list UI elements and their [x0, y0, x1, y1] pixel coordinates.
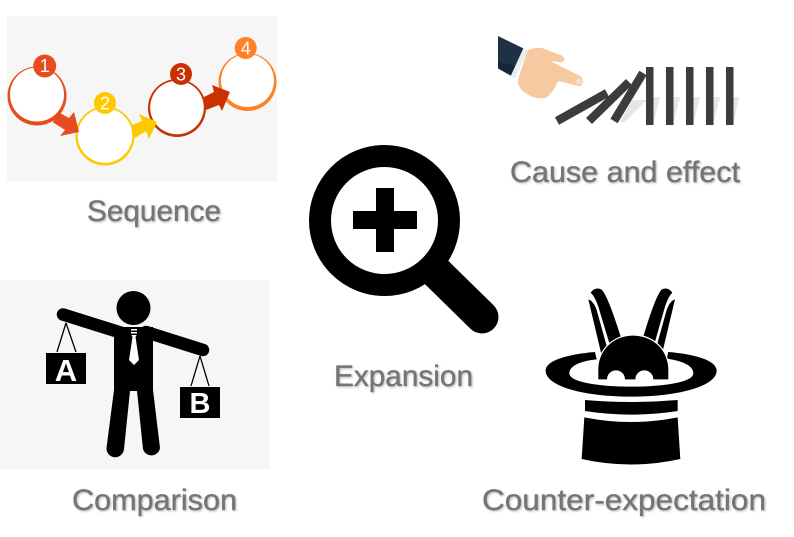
icon: magnifying glass with plus: [320, 156, 482, 317]
icon: hand pushing dominoes: [498, 36, 739, 125]
heading: comparison: Comparison: [72, 484, 237, 517]
heading: sequence: Sequence: [87, 195, 221, 228]
box B: [180, 356, 220, 420]
panel: sequence: [7, 16, 277, 182]
arrow: step 3 to 4: [204, 85, 230, 111]
rabbit ears: [591, 289, 621, 345]
heading: counter-expectation: Counter-expectation: [482, 484, 766, 517]
box B: B: [190, 388, 210, 420]
box A: [46, 323, 86, 388]
arrow: step 1 to 2: [52, 112, 79, 136]
box A: A: [55, 353, 77, 388]
heading: expansion: Expansion: [334, 360, 473, 393]
step 4 circle: 4: [241, 38, 251, 58]
icon: rabbit in a top hat: [546, 289, 717, 464]
step 2 circle: [76, 92, 134, 166]
step 2 circle: 2: [100, 94, 110, 114]
step 3 circle: [148, 63, 206, 137]
step 1 circle: [8, 54, 66, 126]
step 3 circle: 3: [176, 64, 186, 84]
arrow: step 2 to 3: [132, 114, 157, 139]
panel: comparison: [0, 280, 270, 469]
domino shadows: [620, 97, 739, 122]
heading: cause and effect: Cause and effect: [510, 156, 740, 189]
person with arms out: [63, 291, 203, 457]
standing dominoes: [646, 67, 734, 125]
hat brim: [546, 352, 717, 397]
fallen dominoes: [557, 73, 643, 121]
hat body: [582, 417, 680, 464]
step 4 circle: [218, 37, 276, 111]
hat band: [585, 400, 678, 415]
necktie: [129, 329, 139, 365]
rabbit head: [598, 336, 668, 379]
hand: [498, 36, 583, 98]
step 1 circle: 1: [40, 56, 50, 76]
